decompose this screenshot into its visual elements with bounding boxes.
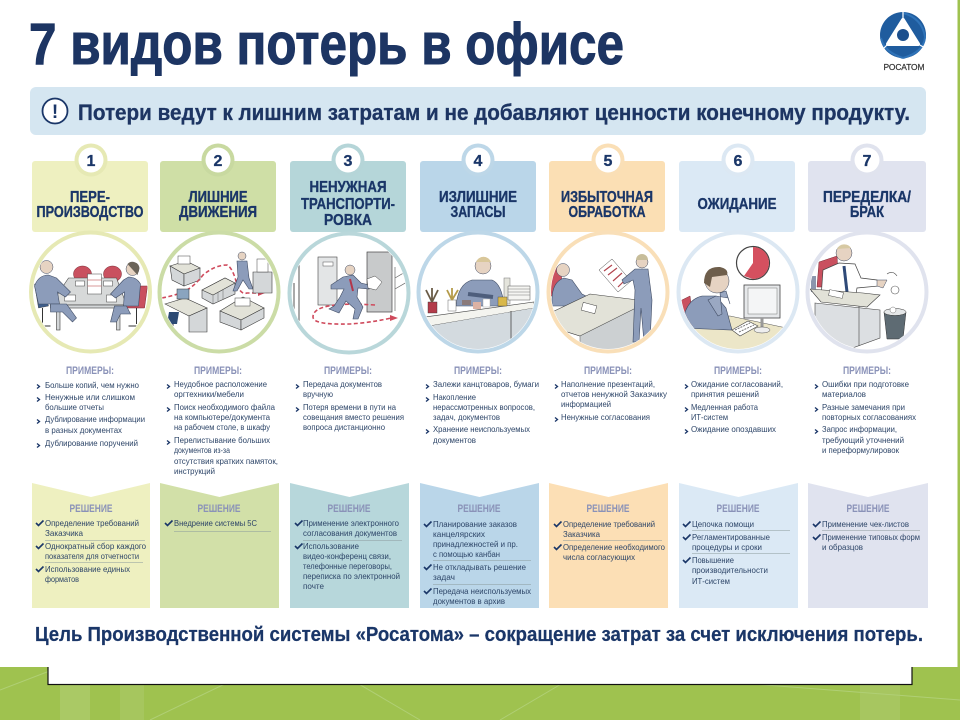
examples 7: требующий уточнений bbox=[822, 435, 904, 445]
solutions 7 bbox=[808, 483, 928, 608]
examples 7: материалов bbox=[822, 389, 866, 399]
solutions 5: Заказчика bbox=[563, 529, 600, 539]
banner text: Потери ведут к лишним затратам и не добавляют ценности конечному продукту. bbox=[78, 100, 910, 125]
header panel 4: ИЗЛИШНИЕ bbox=[439, 189, 517, 206]
solutions 6: Цепочка помощи bbox=[692, 519, 754, 529]
examples 7: и переформулировок bbox=[822, 445, 899, 455]
title: 7 видов потерь в офисе bbox=[29, 12, 624, 77]
header panel 7: ПЕРЕДЕЛКА/ bbox=[823, 189, 911, 206]
solutions 3: Применение электронного bbox=[303, 518, 399, 528]
header panel 3: ТРАНСПОРТИ- bbox=[301, 196, 395, 213]
examples 3: совещания вместо решения bbox=[303, 412, 404, 422]
solutions 4: Передача неиспользуемых bbox=[433, 586, 532, 596]
header panel 5: ИЗБЫТОЧНАЯ bbox=[561, 189, 653, 206]
header panel 2: 2 bbox=[214, 153, 223, 170]
examples 4: задач, документов bbox=[433, 412, 500, 422]
solutions 1: РЕШЕНИЕ bbox=[70, 503, 112, 515]
examples 3: Передача документов bbox=[303, 379, 382, 389]
solutions 3: Использование bbox=[303, 541, 359, 551]
header panel 5 bbox=[549, 144, 665, 232]
solutions 6: Регламентированные bbox=[692, 532, 770, 542]
solutions 3: переписка по электронной bbox=[303, 571, 400, 581]
examples 2: инструкций bbox=[174, 466, 215, 476]
examples 4 bbox=[426, 365, 539, 445]
examples 1: большие отчеты bbox=[45, 402, 104, 412]
examples 4: Хранение неиспользуемых bbox=[433, 424, 531, 434]
solutions 4: Планирование заказов bbox=[433, 519, 517, 529]
examples 3 bbox=[296, 365, 404, 432]
solutions 4: Не откладывать решение bbox=[433, 562, 526, 572]
examples 1: Дублирование поручений bbox=[45, 438, 138, 448]
header panel 3: РОВКА bbox=[324, 212, 372, 229]
column 2: extra movement bbox=[160, 144, 279, 608]
illustration 5: document review bbox=[548, 232, 668, 352]
solutions 6: РЕШЕНИЕ bbox=[716, 503, 760, 515]
solutions 4: задач bbox=[433, 572, 455, 582]
solutions 2 bbox=[160, 483, 279, 608]
header panel 3 bbox=[290, 144, 406, 232]
examples 5: отчетов ненужной Заказчику bbox=[561, 389, 668, 399]
solutions 7: и образцов bbox=[822, 542, 863, 552]
examples 6: принятия решений bbox=[691, 389, 759, 399]
solutions 6: производительности bbox=[692, 565, 768, 575]
solutions 6: Повышение bbox=[692, 555, 734, 565]
solutions 4: РЕШЕНИЕ bbox=[458, 503, 500, 515]
solutions 5 bbox=[549, 483, 668, 608]
examples 2 bbox=[167, 365, 278, 476]
examples 3: вопроса дистанционно bbox=[303, 422, 385, 432]
examples 2: оргтехники/мебели bbox=[174, 389, 244, 399]
illustration 6: man waiting with clock bbox=[678, 232, 798, 352]
examples 3: Потеря времени в пути на bbox=[303, 402, 396, 412]
examples 5 bbox=[555, 365, 668, 422]
examples 7: Запрос информации, bbox=[822, 424, 897, 434]
examples 1: ПРИМЕРЫ: bbox=[66, 365, 114, 377]
solutions 4: с помощью канбан bbox=[433, 549, 500, 559]
examples 4: ПРИМЕРЫ: bbox=[454, 365, 502, 377]
column 7: rework / defects bbox=[808, 144, 928, 608]
solutions 7: РЕШЕНИЕ bbox=[846, 503, 890, 515]
examples 2: документов из-за bbox=[174, 445, 230, 455]
logo: Rosatom: РОСАТОМ bbox=[884, 63, 925, 72]
examples 5: Наполнение презентаций, bbox=[561, 379, 655, 389]
header panel 1: ПЕРЕ- bbox=[70, 189, 110, 206]
header panel 4: ЗАПАСЫ bbox=[450, 204, 506, 221]
solutions 1: Использование единых bbox=[45, 564, 131, 574]
solutions 5: Определение требований bbox=[563, 519, 655, 529]
examples 1 bbox=[37, 365, 145, 448]
examples 2: отсутствия кратких памяток, bbox=[174, 456, 278, 466]
solutions 4 bbox=[420, 483, 539, 608]
header panel 1: ПРОИЗВОДСТВО bbox=[36, 204, 144, 221]
examples 6: ПРИМЕРЫ: bbox=[714, 365, 762, 377]
examples 6: ИТ-систем bbox=[691, 412, 728, 422]
examples 6: Медленная работа bbox=[691, 402, 758, 412]
examples 1: Больше копий, чем нужно bbox=[45, 380, 139, 390]
solutions 5: РЕШЕНИЕ bbox=[586, 503, 630, 515]
solutions 1: форматов bbox=[45, 574, 79, 584]
header panel 3: НЕНУЖНАЯ bbox=[310, 179, 386, 196]
column 1: overproduction bbox=[31, 144, 150, 608]
header panel 6: 6 bbox=[734, 153, 743, 170]
column 4: excess inventory bbox=[418, 144, 539, 608]
banner: key statement bbox=[30, 87, 926, 135]
solutions 4: канцелярских bbox=[433, 529, 486, 539]
header panel 7: БРАК bbox=[850, 204, 884, 221]
illustration 2: office walk path bbox=[160, 232, 278, 352]
header panel 1 bbox=[32, 144, 148, 232]
header panel 6: ОЖИДАНИЕ bbox=[698, 196, 777, 213]
icon: exclamation mark bbox=[42, 98, 68, 124]
examples 4: документов bbox=[433, 435, 476, 445]
examples 6: Ожидание согласований, bbox=[691, 379, 783, 389]
header panel 5: 5 bbox=[604, 153, 613, 170]
examples 2: на рабочем столе, в шкафу bbox=[174, 422, 271, 432]
header panel 5: ОБРАБОТКА bbox=[568, 204, 646, 221]
solutions 3: почте bbox=[303, 581, 324, 591]
examples 1: Ненужные или слишком bbox=[45, 392, 135, 402]
examples 4: Залежи канцтоваров, бумаги bbox=[433, 379, 539, 389]
examples 2: ПРИМЕРЫ: bbox=[194, 365, 242, 377]
column 3: unnecessary transport bbox=[290, 144, 409, 608]
solutions 1: Определение требований bbox=[45, 518, 139, 528]
solutions 3: телефонные переговоры, bbox=[303, 561, 392, 571]
examples 2: Перелистывание больших bbox=[174, 435, 271, 445]
solutions 6 bbox=[679, 483, 798, 608]
solutions 3: видео-конференц связи, bbox=[303, 551, 391, 561]
icon: exclamation mark: ! bbox=[52, 102, 58, 123]
solutions 5: числа согласующих bbox=[563, 552, 636, 562]
examples 4: нерассмотренных вопросов, bbox=[433, 402, 535, 412]
solutions 4: принадлежностей и пр. bbox=[433, 539, 518, 549]
examples 5: информацией bbox=[561, 399, 611, 409]
solutions 7: Применение типовых форм bbox=[822, 532, 920, 542]
header panel 2: ЛИШНИЕ bbox=[188, 189, 248, 206]
column 5: excess processing bbox=[548, 144, 668, 608]
examples 1: Дублирование информации bbox=[45, 414, 145, 424]
header panel 2: ДВИЖЕНИЯ bbox=[179, 204, 257, 221]
examples 2: на компьютере/документа bbox=[174, 412, 270, 422]
illustration 7: paper thrown into bin bbox=[808, 232, 926, 352]
solutions 5: Определение необходимого bbox=[563, 542, 665, 552]
illustration 4: stocked desk bbox=[418, 232, 538, 352]
solutions 1: Заказчика bbox=[45, 528, 83, 538]
examples 7 bbox=[815, 365, 917, 455]
solutions 3: РЕШЕНИЕ bbox=[328, 503, 370, 515]
examples 2: Неудобное расположение bbox=[174, 379, 267, 389]
examples 7: ПРИМЕРЫ: bbox=[843, 365, 891, 377]
header panel 4 bbox=[420, 144, 536, 232]
examples 4: Накопление bbox=[433, 392, 476, 402]
lower white slide frame bbox=[48, 650, 912, 684]
solutions 7: Применение чек-листов bbox=[822, 519, 909, 529]
header panel 4: 4 bbox=[474, 153, 483, 170]
solutions 1: Однократный сбор каждого bbox=[45, 541, 146, 551]
examples 1: в разных документах bbox=[45, 425, 123, 435]
examples 5: Ненужные согласования bbox=[561, 412, 650, 422]
illustration 1: meeting at a table bbox=[31, 232, 150, 352]
solutions 6: ИТ-систем bbox=[692, 576, 730, 586]
logo: Rosatom bbox=[880, 12, 926, 72]
examples 5: ПРИМЕРЫ: bbox=[584, 365, 632, 377]
examples 7: повторных согласованиях bbox=[822, 412, 917, 422]
solutions 3 bbox=[290, 483, 409, 608]
solutions 2: Внедрение системы 5С bbox=[174, 518, 257, 528]
examples 3: ПРИМЕРЫ: bbox=[324, 365, 372, 377]
header panel 7: 7 bbox=[863, 153, 872, 170]
solutions 6: процедуры и сроки bbox=[692, 542, 762, 552]
solutions 3: согласования документов bbox=[303, 528, 397, 538]
header panel 2 bbox=[160, 144, 276, 232]
examples 3: вручную bbox=[303, 389, 333, 399]
column 6: waiting bbox=[678, 144, 798, 608]
solutions 4: документов в архив bbox=[433, 596, 505, 606]
examples 7: Разные замечания при bbox=[822, 402, 905, 412]
solutions 1: показателя для отчетности bbox=[45, 551, 139, 561]
illustration 3: running man with papers bbox=[290, 234, 408, 352]
header panel 6 bbox=[679, 144, 795, 232]
examples 6 bbox=[685, 365, 783, 434]
solutions 2: РЕШЕНИЕ bbox=[198, 503, 240, 515]
solutions 1 bbox=[32, 483, 150, 608]
examples 6: Ожидание опоздавших bbox=[691, 424, 777, 434]
examples 7: Ошибки при подготовке bbox=[822, 379, 909, 389]
header panel 7 bbox=[808, 144, 926, 232]
header panel 3: 3 bbox=[344, 153, 353, 170]
examples 2: Поиск необходимого файла bbox=[174, 402, 275, 412]
header panel 1: 1 bbox=[87, 153, 96, 170]
